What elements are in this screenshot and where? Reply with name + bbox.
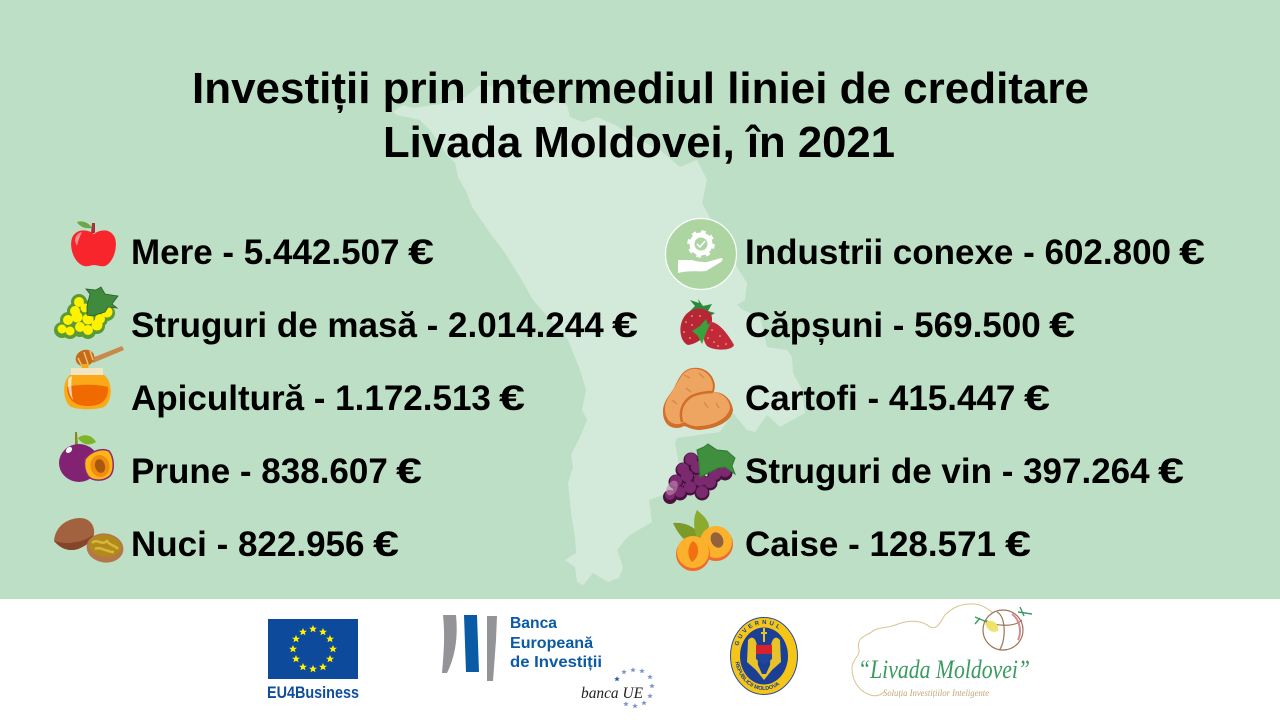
row label: mere: € (408, 233, 434, 272)
map of Moldova (393, 85, 805, 585)
row label: struguri de masa: € (612, 306, 638, 345)
logo: Livada Moldovei (852, 604, 1032, 699)
row label: prune: Prune - 838.607 (131, 452, 388, 491)
row label: cartofi: € (1024, 379, 1050, 418)
footer panel (0, 599, 1280, 720)
icon: apple (71, 221, 116, 266)
title: Livada Moldovei, în 2021 (383, 118, 895, 167)
logo: Banca Europeana de Investitii (442, 615, 655, 708)
icon: white grapes (54, 287, 118, 339)
icon: industry gear and hand (666, 218, 736, 290)
icon: honey jar (64, 346, 124, 409)
icon: potatoes (663, 368, 733, 430)
logo: Government of Moldova emblem: GUVERNUL (734, 620, 779, 646)
row label: cartofi: Cartofi - 415.447 (745, 379, 1015, 418)
row label: caise: € (1005, 525, 1031, 564)
icon: walnuts (54, 518, 125, 565)
row label: mere: Mere - 5.442.507 (131, 233, 400, 272)
logo: Government of Moldova emblem (730, 617, 798, 695)
row label: apicultura: € (499, 379, 525, 418)
row label: capsuni: € (1049, 306, 1075, 345)
row label: prune: € (396, 452, 422, 491)
row label: caise: Caise - 128.571 (745, 525, 996, 564)
row label: struguri de masa: Struguri de masă - 2.014.244 (131, 306, 604, 345)
icon: plum (59, 432, 113, 482)
title (192, 64, 1089, 167)
row label: industrii conexe: € (1179, 233, 1205, 272)
logo: Banca Europeana de Investitii: Europeană (510, 635, 593, 652)
row label: struguri de vin: € (1158, 452, 1184, 491)
icon: strawberries (680, 299, 734, 350)
row label: nuci: Nuci - 822.956 (131, 525, 364, 564)
logo: Banca Europeana de Investitii: de Investiții (510, 654, 602, 671)
logo: Government of Moldova emblem: REPUBLICII MOLDOVA (736, 662, 780, 690)
icon: apricots (673, 510, 733, 571)
logo: Banca Europeana de Investitii: banca UE (581, 685, 643, 702)
logo: EU4Business: EU4Business (267, 683, 359, 702)
row label: struguri de vin: Struguri de vin - 397.264 (745, 452, 1150, 491)
title: Investiții prin intermediul liniei de creditare (192, 64, 1089, 113)
row label: nuci: € (373, 525, 399, 564)
row label: capsuni: Căpșuni - 569.500 (745, 306, 1041, 345)
row label: apicultura: Apicultură - 1.172.513 (131, 379, 491, 418)
logo: Banca Europeana de Investitii: Banca (510, 615, 557, 632)
row label: industrii conexe: Industrii conexe - 602.800 (745, 233, 1171, 272)
icon: purple grapes (663, 444, 735, 504)
logo: Livada Moldovei: “Livada Moldovei” (858, 655, 1030, 684)
logo: Livada Moldovei: Soluția Investițiilor Inteligente (883, 689, 989, 699)
logo: EU4Business (267, 619, 359, 702)
